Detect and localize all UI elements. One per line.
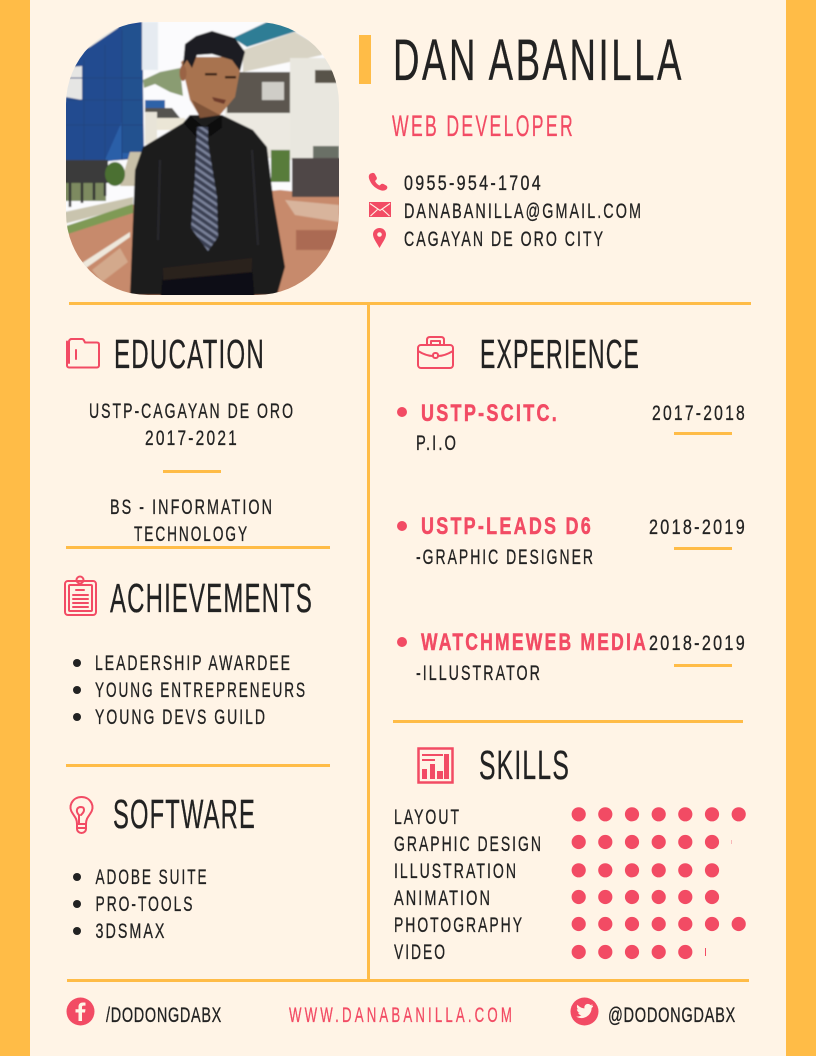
job entry 2 xyxy=(398,513,747,569)
software item: PRO-TOOLS xyxy=(96,893,194,916)
collar xyxy=(184,116,202,136)
heading: achievements: ACHIEVEMENTS xyxy=(110,575,313,621)
skill: illustration: ILLUSTRATION xyxy=(394,860,518,883)
job entry 1 xyxy=(398,400,747,455)
job entry 1: P.I.O xyxy=(416,432,458,455)
job entry 1: USTP-SCITC. xyxy=(421,400,559,427)
job entry 3: WATCHMEWEB MEDIA xyxy=(421,629,648,656)
achievement item xyxy=(73,679,307,702)
right side band xyxy=(786,0,816,1056)
facebook handle: /DODONGDABX xyxy=(106,1004,222,1027)
heading: education: EDUCATION xyxy=(114,331,265,377)
software item: 3DSMAX xyxy=(96,920,166,943)
website: WWW.DANABANILLA.COM xyxy=(289,1004,515,1027)
twitter handle: @DODONGDABX xyxy=(608,1004,736,1027)
icon: bar chart xyxy=(418,748,452,782)
skill: graphic design xyxy=(394,833,732,856)
panel: experience xyxy=(398,331,747,685)
tie xyxy=(191,127,218,251)
icon: light bulb xyxy=(71,797,92,833)
job entry 2: USTP-LEADS D6 xyxy=(421,513,593,540)
software item: ADOBE SUITE xyxy=(96,866,208,889)
icon: twitter xyxy=(570,998,598,1026)
top divider xyxy=(69,302,751,305)
hair xyxy=(183,31,245,71)
achievement item: YOUNG ENTREPRENEURS xyxy=(95,679,307,702)
software item xyxy=(73,920,166,943)
icon: folder xyxy=(67,339,99,368)
software item xyxy=(73,893,194,916)
job title: WEB DEVELOPER xyxy=(392,110,575,143)
heading: experience: EXPERIENCE xyxy=(480,331,640,377)
degree: BS - INFORMATION xyxy=(110,496,274,519)
skill: animation xyxy=(394,887,719,910)
job entry 3: -ILLUSTRATOR xyxy=(416,662,542,685)
achievement item: LEADERSHIP AWARDEE xyxy=(95,652,292,675)
skill: illustration xyxy=(394,860,719,883)
achievement item xyxy=(73,706,267,729)
skill: video xyxy=(394,941,706,964)
contact: phone xyxy=(369,172,543,195)
experience divider xyxy=(393,720,743,723)
name accent bar xyxy=(359,35,371,84)
panel: software xyxy=(71,791,256,943)
school: USTP-CAGAYAN DE ORO xyxy=(89,400,295,423)
neck and face xyxy=(181,57,240,117)
job entry 2: -GRAPHIC DESIGNER xyxy=(416,546,595,569)
achievement item xyxy=(73,652,292,675)
job entry 3: 2018-2019 xyxy=(649,632,747,655)
icon: phone xyxy=(369,173,387,191)
short divider xyxy=(163,470,221,473)
skill: photography: PHOTOGRAPHY xyxy=(394,914,524,937)
job entry 2: 2018-2019 xyxy=(649,516,747,539)
bottom divider xyxy=(67,979,749,982)
icon: map pin xyxy=(373,228,386,248)
left side band xyxy=(0,0,30,1056)
icon: envelope xyxy=(369,202,391,217)
skill: animation: ANIMATION xyxy=(394,887,492,910)
icon: briefcase xyxy=(418,337,453,368)
skill: layout xyxy=(394,806,745,829)
contact: location xyxy=(373,228,605,251)
education divider xyxy=(66,546,330,549)
email address: DANABANILLA@GMAIL.COM xyxy=(404,200,643,223)
job entry 3 xyxy=(398,629,747,685)
job entry 1: 2017-2018 xyxy=(652,402,747,425)
panel: education xyxy=(67,331,295,546)
city: CAGAYAN DE ORO CITY xyxy=(404,228,605,251)
heading: skills: SKILLS xyxy=(479,742,570,788)
center divider xyxy=(367,305,370,980)
panel: achievements xyxy=(65,575,313,729)
heading: software: SOFTWARE xyxy=(113,791,256,837)
footer xyxy=(66,998,736,1027)
degree second line: TECHNOLOGY xyxy=(134,523,249,546)
school years: 2017-2021 xyxy=(145,427,239,450)
phone number: 0955-954-1704 xyxy=(404,172,543,195)
icon: facebook xyxy=(66,998,94,1026)
profile photo xyxy=(60,16,345,301)
icon: clipboard xyxy=(65,576,96,615)
software item xyxy=(73,866,208,889)
achievements divider xyxy=(66,764,330,767)
skill: photography xyxy=(394,914,745,937)
skill: video: VIDEO xyxy=(394,941,447,964)
skill: layout: LAYOUT xyxy=(394,806,461,829)
skill: graphic design: GRAPHIC DESIGN xyxy=(394,833,543,856)
contact: email xyxy=(369,200,643,223)
achievement item: YOUNG DEVS GUILD xyxy=(95,706,267,729)
shirt xyxy=(130,115,285,295)
pants and belt xyxy=(160,272,256,295)
panel: skills xyxy=(394,742,745,964)
